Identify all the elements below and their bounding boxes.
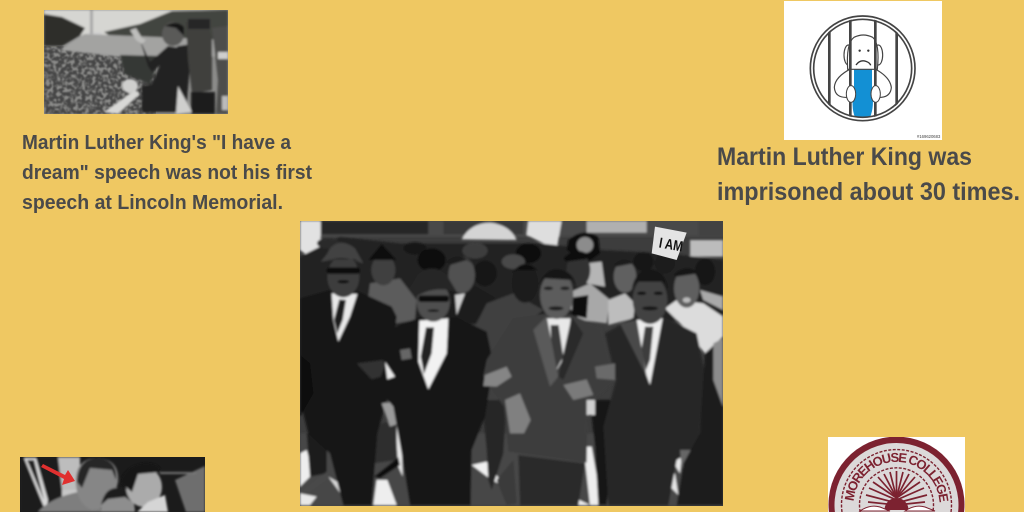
text block: imprisoned fact: Martin Luther King was — [717, 143, 972, 171]
text block: I have a dream fact: dream" speech was not his first — [22, 162, 312, 184]
street scene backdrop — [300, 220, 724, 327]
street with highlights — [300, 399, 722, 506]
marcher 2 — [377, 268, 493, 505]
photo: family with red arrow — [20, 457, 205, 512]
stock image id: #169620683 — [917, 134, 941, 139]
sunburst — [866, 471, 927, 505]
text block: imprisoned fact — [717, 143, 1020, 206]
jail bars — [829, 13, 897, 123]
text block: I have a dream fact: Martin Luther King's "I have a — [22, 132, 292, 154]
text block: I have a dream fact — [22, 132, 312, 214]
marcher 3: King — [482, 270, 598, 506]
seal lettering: MOREHOUSE COLLEGE — [844, 452, 948, 502]
marcher 4 — [595, 269, 705, 505]
icon: red arrow — [41, 464, 75, 485]
sign: I AM — [652, 227, 687, 260]
text block: I have a dream fact: speech at Lincoln Memorial. — [22, 192, 283, 214]
photo: march with Martin Luther King — [300, 220, 724, 512]
sign: I AM: I AM — [658, 236, 684, 255]
hands on bars — [846, 86, 880, 102]
jail ring — [810, 16, 915, 121]
background marchers — [368, 244, 723, 407]
marcher 1 (left) — [300, 243, 399, 505]
rightmost marcher — [300, 338, 723, 505]
logo: Morehouse College seal — [828, 437, 965, 512]
photo: I have a dream speech at Lincoln Memorial — [44, 10, 228, 114]
icon: figure behind prison bars — [784, 1, 942, 140]
icon: prisoner figure — [834, 35, 891, 117]
